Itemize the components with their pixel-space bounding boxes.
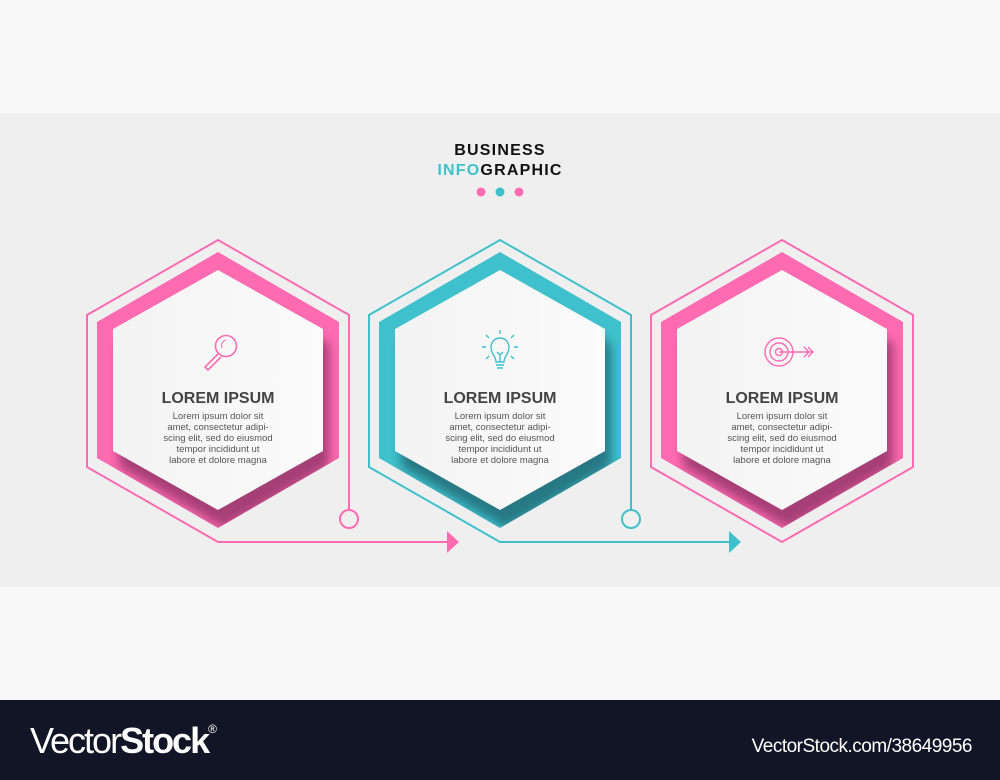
heading: LOREM IPSUM <box>444 390 556 407</box>
icon: target <box>765 338 813 366</box>
dots <box>476 188 524 196</box>
text block: Lorem ipsum dolor sit <box>737 411 828 422</box>
footer: VectorStock.com/38649956 <box>752 736 972 757</box>
text block: tempor incididunt ut <box>177 444 260 455</box>
title: BUSINESS <box>454 142 546 159</box>
title: INFOGRAPHIC <box>437 162 563 179</box>
text block: labore et dolore magna <box>169 455 268 466</box>
text block <box>445 411 555 466</box>
text block: scing elit, sed do eiusmod <box>163 433 273 444</box>
text block: tempor incididunt ut <box>459 444 542 455</box>
text block: Lorem ipsum dolor sit <box>455 411 546 422</box>
text block: amet, consectetur adipi- <box>731 422 833 433</box>
text block: labore et dolore magna <box>451 455 550 466</box>
text block: amet, consectetur adipi- <box>449 422 551 433</box>
footer: VectorStock <box>30 720 208 761</box>
icon: light bulb <box>482 330 518 368</box>
panel: step 3 <box>651 240 913 542</box>
text block <box>163 411 273 466</box>
text block <box>727 411 837 466</box>
text block: amet, consectetur adipi- <box>167 422 269 433</box>
text block: Lorem ipsum dolor sit <box>173 411 264 422</box>
heading: LOREM IPSUM <box>162 390 274 407</box>
text block: labore et dolore magna <box>733 455 832 466</box>
text block: scing elit, sed do eiusmod <box>445 433 555 444</box>
panel: step 2 <box>369 240 741 553</box>
footer <box>0 700 1000 780</box>
footer: ® <box>208 722 217 736</box>
text block: scing elit, sed do eiusmod <box>727 433 837 444</box>
title <box>437 142 563 179</box>
icon: magnifier <box>205 336 236 370</box>
text block: tempor incididunt ut <box>741 444 824 455</box>
panel: step 1 <box>87 240 459 553</box>
heading: LOREM IPSUM <box>726 390 838 407</box>
